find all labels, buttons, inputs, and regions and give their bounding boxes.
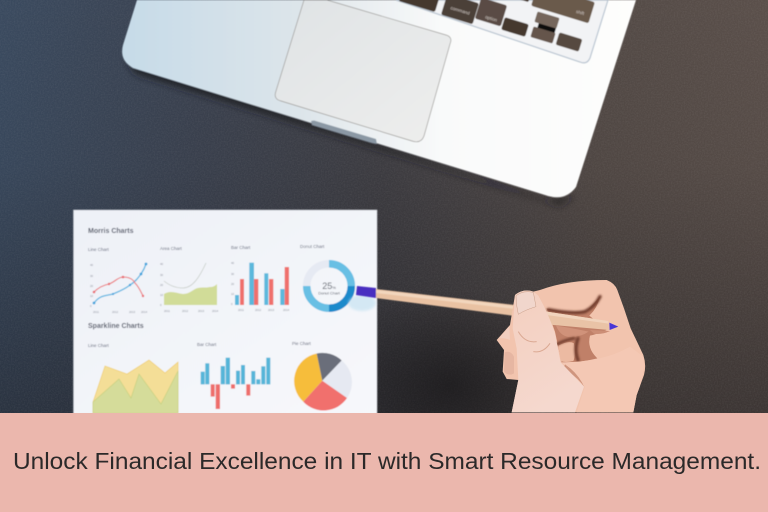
shading under the pencil bbox=[590, 330, 610, 334]
bar chart bbox=[231, 245, 290, 312]
line chart: 2012 bbox=[112, 310, 119, 314]
keyboard well bbox=[396, 0, 608, 63]
paper report bbox=[74, 210, 377, 414]
key labels: command bbox=[450, 5, 471, 16]
donut chart bbox=[300, 244, 351, 308]
banner headline: Unlock Financial Excellence in IT with Smart Resource Management. bbox=[13, 448, 761, 474]
line chart: 0 bbox=[90, 304, 92, 308]
pencil ferrule bbox=[356, 286, 376, 298]
dark creases bbox=[548, 297, 600, 360]
palm highlight bbox=[562, 347, 644, 412]
area chart bbox=[160, 246, 219, 313]
area chart: 30 bbox=[160, 273, 164, 277]
thumb knuckle lines bbox=[518, 332, 550, 352]
sparkline bar chart bbox=[197, 342, 270, 409]
bar chart: 0 bbox=[231, 302, 233, 306]
area chart: 10 bbox=[160, 293, 164, 297]
line chart: 2011 bbox=[93, 310, 99, 314]
area chart: 20 bbox=[160, 283, 164, 287]
bottom banner bbox=[0, 413, 768, 512]
bar chart: 20 bbox=[231, 282, 235, 286]
donut chart: Donut Chart bbox=[318, 290, 341, 296]
pale blue pencil reflection bbox=[348, 295, 376, 311]
area chart: Area Chart bbox=[160, 246, 183, 251]
pencil shaft left of the thumb bbox=[356, 286, 515, 316]
area chart: 0 bbox=[160, 303, 162, 307]
hand back and fingers bbox=[497, 280, 645, 412]
lower knuckle detail bbox=[504, 352, 514, 375]
bar chart: 2011 bbox=[238, 308, 244, 312]
key labels bbox=[450, 5, 586, 23]
bar chart: 2012 bbox=[255, 308, 262, 312]
bar chart: 2014 bbox=[283, 308, 290, 312]
line chart: 40 bbox=[90, 263, 94, 267]
donut chart: Donut Chart bbox=[300, 244, 325, 249]
line chart: 30 bbox=[90, 274, 94, 278]
paper sheet bbox=[74, 210, 377, 414]
lower finger bbox=[558, 342, 575, 362]
sparkline line chart bbox=[88, 343, 178, 413]
finger cavity shadow bbox=[547, 297, 607, 362]
area chart: 2014 bbox=[212, 309, 219, 313]
section heading: Sparkline Charts: Sparkline Charts bbox=[88, 323, 144, 330]
palm crease bbox=[563, 364, 584, 387]
area chart: 2012 bbox=[182, 309, 189, 313]
sparkline line chart: Line Chart bbox=[88, 343, 110, 348]
shadow beside the hand bbox=[325, 290, 575, 480]
key labels: shift bbox=[575, 9, 586, 16]
area chart: 2013 bbox=[198, 309, 205, 313]
finger below the pencil bbox=[556, 326, 589, 337]
laptop lid notch bbox=[311, 120, 377, 144]
bar chart: 2013 bbox=[268, 308, 275, 312]
laptop shadow bbox=[125, 58, 575, 206]
keyboard keys bbox=[399, 0, 595, 52]
pencil wood bbox=[376, 289, 515, 316]
line chart bbox=[88, 247, 148, 314]
line chart: 20 bbox=[90, 284, 94, 288]
pencil tip bbox=[609, 323, 618, 330]
thumbnail bbox=[516, 292, 536, 314]
line chart: 2013 bbox=[129, 310, 136, 314]
pencil highlight bbox=[376, 290, 515, 309]
thumb bbox=[512, 291, 584, 412]
line chart: 10 bbox=[90, 294, 94, 298]
area chart: 40 bbox=[160, 262, 164, 266]
area chart: 2011 bbox=[164, 309, 170, 313]
pencil right of the thumb bbox=[547, 312, 609, 330]
laptop bbox=[122, 0, 636, 206]
key labels: option bbox=[485, 14, 498, 23]
hand bbox=[497, 280, 645, 412]
line chart: 2014 bbox=[141, 310, 148, 314]
banner background bbox=[0, 413, 768, 512]
pencil highlight right bbox=[547, 312, 609, 324]
fingertip shadow bbox=[499, 327, 510, 340]
bar chart: 30 bbox=[231, 272, 235, 276]
trackpad bbox=[275, 0, 451, 142]
line chart: Line Chart bbox=[88, 247, 110, 252]
laptop body bbox=[122, 0, 636, 197]
bar chart: 40 bbox=[231, 261, 235, 265]
bar chart: 10 bbox=[231, 292, 235, 296]
sparkline pie chart: Pie Chart bbox=[292, 341, 312, 346]
section heading: Morris Charts: Morris Charts bbox=[88, 228, 134, 235]
donut chart: 25% bbox=[322, 281, 336, 291]
sparkline bar chart: Bar Chart bbox=[197, 342, 217, 347]
sparkline pie chart bbox=[292, 341, 352, 411]
bar chart: Bar Chart bbox=[231, 245, 251, 250]
